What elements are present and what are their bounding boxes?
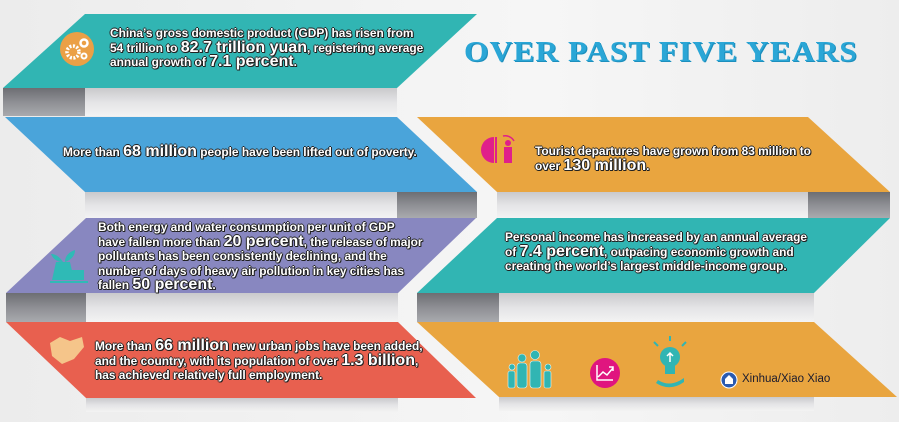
icon: lightbulb in hand — [654, 336, 686, 387]
text: GDP: 54 trillion to 82.7 trillion yuan, registering average — [110, 38, 423, 56]
text: income: Personal income has increased by an annual average — [505, 230, 807, 244]
text: tourism — [534, 144, 812, 174]
text: tourism: Tourist departures have grown from 83 million to — [535, 144, 811, 158]
band: employment red — [6, 322, 476, 398]
text: environment: pollutants has been consistently declining, and the — [98, 249, 387, 263]
text: employment: has achieved relatively full employment. — [95, 368, 322, 382]
text: income: creating the world’s largest middle-income group. — [505, 259, 787, 273]
text: employment — [94, 337, 423, 382]
icon: globe traveler — [481, 136, 514, 163]
icon: chart circle — [590, 358, 620, 388]
band: tourism orange — [417, 117, 890, 192]
icon: factory plant — [50, 250, 88, 283]
text: environment: Both energy and water consumption per unit of GDP — [98, 220, 395, 234]
icon: xinhua logo — [721, 372, 737, 388]
band: poverty blue — [5, 117, 477, 192]
icon: handshake — [50, 337, 84, 364]
text: GDP — [109, 26, 424, 70]
text: employment: and the country, with its population of over 1.3 billion, — [95, 352, 418, 368]
band: environment purple — [6, 218, 476, 293]
shadows — [3, 88, 890, 412]
text: GDP: China’s gross domestic product (GDP) has risen from — [110, 26, 413, 40]
band: icons orange — [417, 322, 897, 397]
text: environment: fallen 50 percent. — [98, 276, 216, 293]
text: income — [504, 230, 808, 274]
text: environment: have fallen more than 20 percent, the release of major — [98, 232, 423, 250]
title: OVER PAST FIVE YEARS — [464, 37, 858, 68]
band: income teal — [417, 218, 890, 293]
text: employment: More than 66 million new urban jobs have been added, — [95, 337, 423, 354]
text: poverty: More than 68 million people have been lifted out of poverty. — [63, 143, 417, 160]
text: environment: number of days of heavy air pollution in key cities has — [98, 264, 404, 278]
text: GDP: annual growth of 7.1 percent. — [110, 53, 297, 70]
text: tourism: over 130 million. — [535, 156, 649, 174]
icon: family — [508, 350, 551, 388]
text: environment — [97, 220, 424, 294]
credit: Xinhua/Xiao Xiao — [742, 373, 830, 385]
text: income: of 7.4 percent, outpacing economic growth and — [505, 242, 794, 260]
icon: gears — [60, 32, 94, 66]
band: GDP teal — [3, 14, 477, 88]
